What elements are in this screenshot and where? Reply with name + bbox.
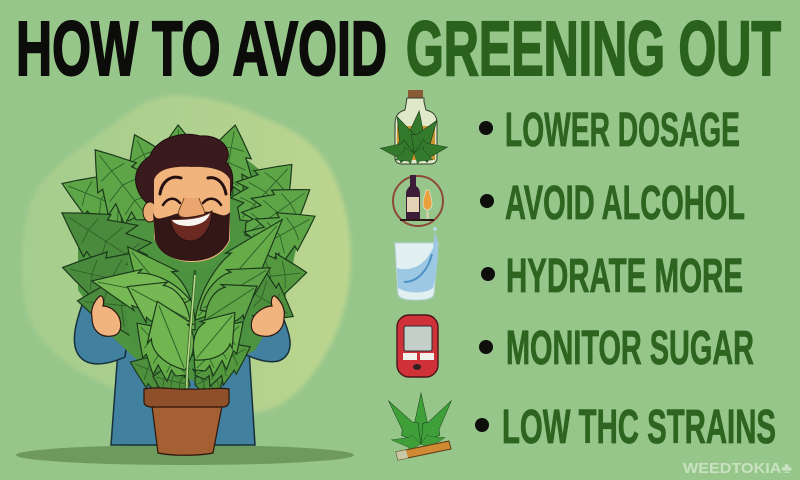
- back fronds: [45, 121, 328, 376]
- watermark: WEEDTOKIA♣: [683, 460, 792, 477]
- icon: no alcohol: [393, 175, 443, 226]
- tip: monitor sugar: [397, 315, 754, 377]
- title: [16, 6, 781, 92]
- illustration: man hugging plant: [16, 95, 354, 465]
- eyebrows and eyes: [160, 177, 226, 205]
- plant pot: [144, 388, 229, 455]
- face: [154, 167, 230, 262]
- teeth: [172, 213, 210, 226]
- beard: [153, 212, 230, 261]
- front foliage mass: [125, 240, 262, 380]
- smile: [170, 211, 212, 241]
- ears: [143, 202, 157, 222]
- bullet: [479, 340, 493, 354]
- stem: [187, 270, 195, 392]
- tip: low thc strains: [380, 393, 776, 460]
- icon: glass of water: [395, 227, 438, 300]
- nose: [179, 198, 205, 218]
- list: tips: [379, 90, 776, 460]
- tip: hydrate more: [395, 227, 743, 303]
- hair: [136, 134, 233, 212]
- icon: bottle with cannabis leaf: [379, 90, 450, 168]
- background blob: [22, 95, 351, 414]
- head: [136, 134, 233, 262]
- tip: lower dosage: [379, 90, 740, 168]
- bullet: [480, 194, 494, 208]
- front fronds: [88, 206, 298, 405]
- bullet: [475, 418, 489, 432]
- bullet: [479, 121, 493, 135]
- tip: avoid alcohol: [393, 175, 745, 230]
- icon: leaf and joint: [380, 393, 460, 460]
- foliage mass: [78, 150, 298, 382]
- hands: [92, 296, 284, 336]
- bullet: [481, 267, 495, 281]
- title: how to avoid: HOW TO AVOID: [16, 6, 387, 92]
- ground shadow: [16, 445, 354, 465]
- shirt and arms: [74, 305, 290, 445]
- icon: glucose meter: [397, 315, 438, 377]
